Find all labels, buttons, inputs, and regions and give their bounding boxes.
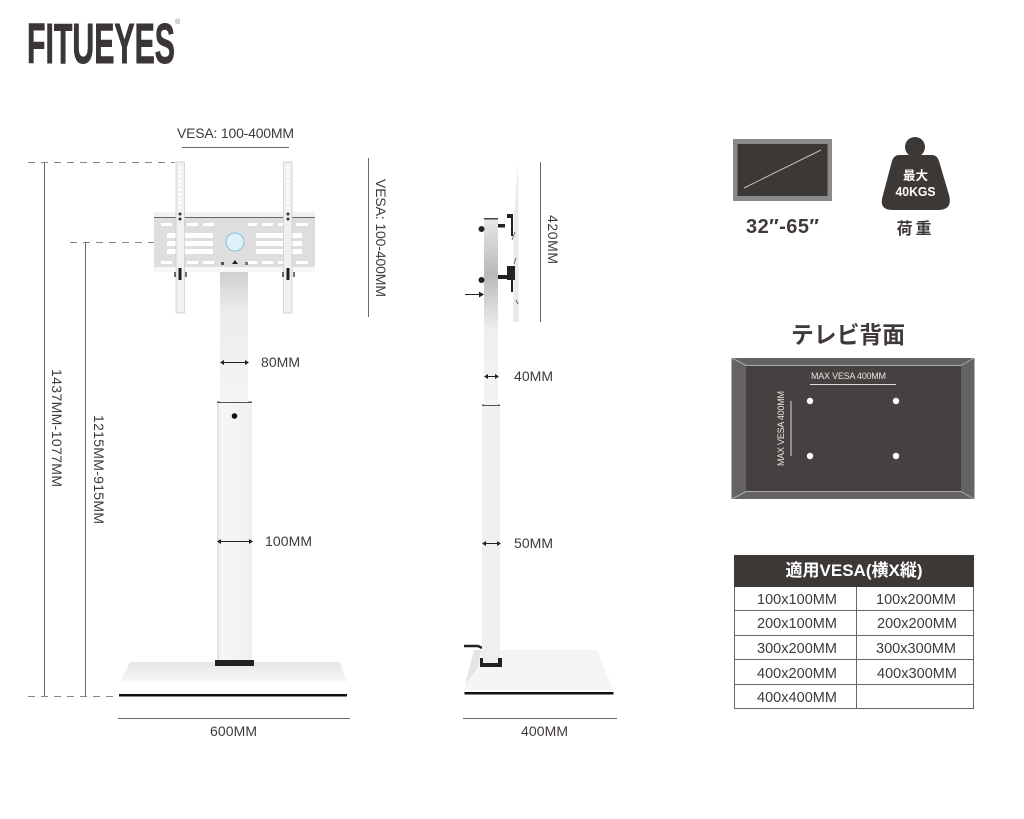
icon: weight: 40KGS <box>896 184 936 199</box>
label: screen size: 32″-65″ <box>746 216 819 238</box>
logo <box>27 12 181 76</box>
table header: 適用VESA(横X縦) <box>786 561 922 580</box>
side upper column <box>484 218 498 405</box>
label: vertical VESA: VESA: 100-400MM <box>373 179 389 297</box>
label: mount height: 1215MM-915MM <box>91 415 107 524</box>
dimension: 420MM: 420MM <box>545 215 561 264</box>
front upper column <box>220 272 248 402</box>
logo: FITUEYES <box>27 12 175 76</box>
side mount <box>478 163 519 322</box>
side pointer arrow <box>465 292 484 298</box>
dimension: 400MM: 400MM <box>521 723 568 739</box>
table rows: 100x200MM <box>876 592 956 608</box>
table rows: 200x200MM <box>877 616 957 632</box>
icon: weight <box>882 137 950 210</box>
label: load: 荷重 <box>896 220 935 238</box>
arrow: 80MM <box>220 354 300 370</box>
logo: ® <box>175 18 181 26</box>
arrow: 80MM: 80MM <box>261 354 300 370</box>
label: horizontal max VESA: MAX VESA 400MM <box>811 371 886 381</box>
table rows: 400x300MM <box>877 666 957 682</box>
table rows: 400x200MM <box>757 666 837 682</box>
front lower column <box>215 402 254 666</box>
table header <box>734 555 974 587</box>
table rows: 300x300MM <box>876 641 956 657</box>
table rows: 200x100MM <box>757 616 837 632</box>
front base <box>119 662 347 696</box>
icon: weight: 最大 <box>903 168 928 183</box>
table rows <box>757 592 957 706</box>
dimension: overall height guide lines <box>28 162 216 696</box>
table rows: 400x400MM <box>757 690 837 706</box>
arrow: 40MM: 40MM <box>514 368 553 384</box>
label: horizontal VESA: VESA: 100-400MM <box>177 125 294 141</box>
mount rails <box>175 162 294 313</box>
arrow: 100MM <box>217 533 312 549</box>
label: total height: 1437MM-1077MM <box>49 369 65 487</box>
arrow: 50MM: 50MM <box>514 535 553 551</box>
front view stand <box>119 162 347 696</box>
side lower column <box>480 404 502 667</box>
arrow: 100MM: 100MM <box>265 533 312 549</box>
wall plate <box>154 212 315 272</box>
table: VESA sizes <box>734 555 974 708</box>
heading: TV back: テレビ背面 <box>791 322 905 348</box>
arrow: 40MM <box>484 368 553 384</box>
label: vertical max VESA: MAX VESA 400MM <box>776 391 786 466</box>
icon: TV size <box>733 139 832 201</box>
table rows: 300x200MM <box>757 641 837 657</box>
mounting holes <box>807 398 899 459</box>
TV back panel <box>732 358 974 499</box>
side view stand <box>464 163 614 694</box>
side base <box>464 646 614 694</box>
table rows: 100x100MM <box>757 592 837 608</box>
arrow: 50MM <box>482 535 553 551</box>
dimension: 600MM: 600MM <box>210 723 257 739</box>
